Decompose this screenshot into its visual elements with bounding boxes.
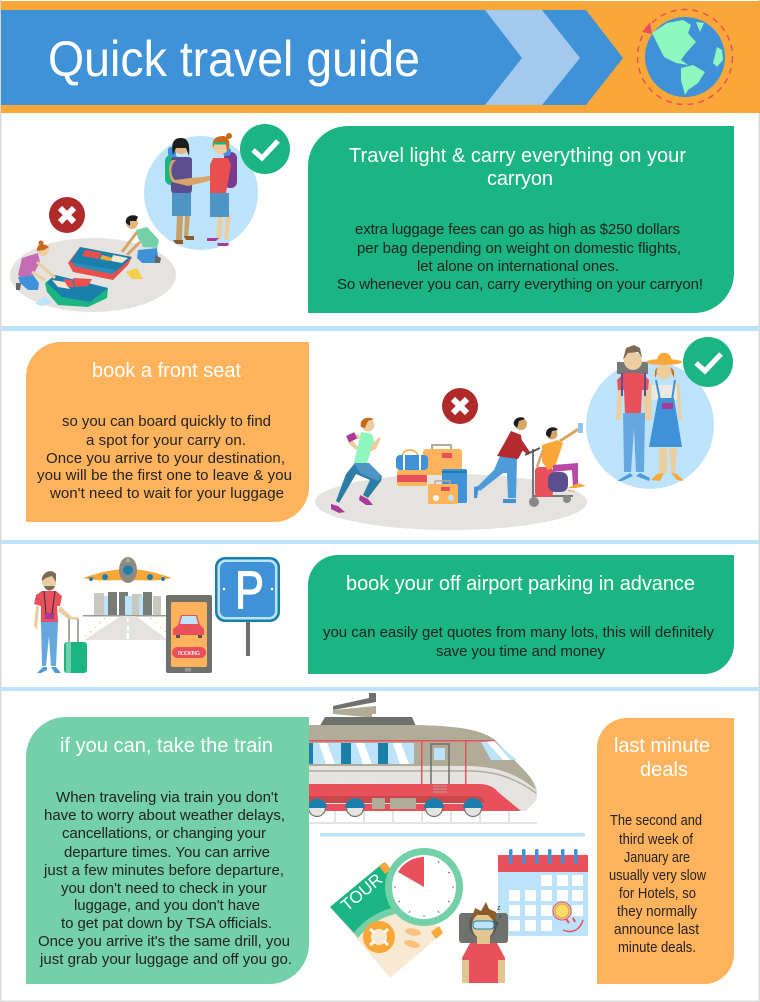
illustration: runner, luggage and trolley — [315, 417, 587, 530]
panel body text: to get pat down by TSA officials. — [61, 915, 272, 932]
kneeling woman — [16, 240, 55, 290]
illustration: sleeping passenger: z — [496, 921, 499, 927]
panel body text — [323, 624, 714, 660]
panel body text: per bag depending on weight on domestic flights, — [357, 240, 681, 257]
illustration: train — [308, 693, 537, 824]
icon: green check — [683, 337, 733, 387]
panel body text: just a few minutes before departure, — [43, 862, 284, 879]
panel body text: you will be the first one to leave & you — [37, 467, 292, 484]
panel: travel light — [308, 126, 734, 313]
panel heading: last minute — [614, 735, 710, 757]
panel body text: luggage, and you don't have — [74, 897, 260, 914]
panel body text: The second and — [610, 812, 702, 829]
icon: parking sign — [215, 557, 280, 656]
icon: parking sign: P — [235, 561, 264, 620]
panel heading: deals — [640, 759, 688, 781]
panel heading — [349, 145, 686, 190]
panel body text — [38, 789, 292, 968]
icon: red cross — [49, 197, 85, 233]
panel body text: January are — [624, 849, 690, 866]
man pushing trolley — [474, 417, 530, 503]
icon: calendar — [498, 849, 588, 936]
panel body text: departure times. You can arrive — [64, 844, 270, 861]
illustration: friends with backpacks — [144, 133, 258, 250]
panel body text: they normally — [617, 903, 697, 920]
illustration: tour ticket: TOUR — [337, 870, 386, 915]
panel body text: so you can board quickly to find — [62, 413, 271, 430]
panel body text: Once you arrive to your destination, — [46, 450, 285, 467]
panel body text — [37, 413, 292, 502]
divider under train — [320, 833, 585, 836]
panel heading: carryon — [487, 168, 553, 190]
panel: parking — [308, 555, 734, 674]
panel body text: announce last — [614, 921, 700, 938]
illustration: phone booking — [166, 595, 212, 673]
illustration: sleeping passenger: z — [497, 905, 501, 912]
panel body text: usually very slow — [609, 867, 706, 884]
panel: take the train — [26, 717, 309, 984]
panel body text: Once you arrive it's the same drill, you — [38, 933, 290, 950]
panel: last minute deals — [597, 718, 734, 984]
panel body text: save you time and money — [436, 643, 606, 660]
illustration: airport road and plane — [83, 555, 172, 640]
runner — [331, 418, 382, 513]
divider band 1 — [1, 326, 759, 331]
panel body text: a spot for your carry on. — [86, 432, 246, 449]
icon: globe — [638, 10, 732, 104]
luggage pile — [396, 445, 467, 504]
illustration: phone booking: BOOKING — [178, 651, 200, 657]
title: Quick travel guide — [48, 31, 420, 87]
panel heading — [614, 735, 710, 781]
illustration: packing suitcases — [10, 215, 176, 312]
panel body text: let alone on international ones. — [417, 258, 619, 275]
panel body text — [337, 221, 703, 293]
panel heading: book a front seat — [92, 360, 241, 382]
illustration: sleeping passenger — [459, 902, 508, 983]
illustration: young couple — [586, 345, 714, 489]
header ribbon — [1, 10, 623, 105]
panel: front seat — [26, 342, 309, 522]
header banner — [1, 1, 760, 113]
icon: clock — [388, 852, 460, 922]
illustration: tour ticket — [330, 862, 443, 978]
icon: red cross — [442, 388, 478, 424]
panel body text: you can easily get quotes from many lots, this will definitely — [323, 624, 714, 641]
panel body text: When traveling via train you don't — [56, 789, 279, 806]
icon: green check — [240, 124, 290, 174]
panel body text: cancellations, or changing your — [62, 825, 266, 842]
panel body text — [609, 812, 706, 956]
panel body text: won't need to wait for your luggage — [49, 485, 284, 502]
illustration: traveller with suitcase — [34, 571, 87, 673]
panel heading: if you can, take the train — [60, 735, 273, 757]
divider band 3 — [1, 687, 759, 691]
panel body text: you don't need to check in your — [61, 880, 267, 897]
panel body text: minute deals. — [618, 939, 696, 956]
divider band 2 — [1, 540, 759, 544]
illustration: sleeping passenger: z — [499, 914, 502, 920]
panel body text: extra luggage fees can go as high as $250 dollars — [355, 221, 680, 238]
panel body text: third week of — [619, 831, 694, 848]
panel body text: for Hotels, so — [619, 885, 696, 902]
ribbon chevron — [485, 10, 580, 105]
panel body text: have to worry about weather delays, — [44, 807, 285, 824]
kneeling man — [122, 215, 161, 263]
panel body text: just grab your luggage and off you go. — [39, 951, 292, 968]
panel heading: Travel light & carry everything on your — [349, 145, 686, 167]
trolley with child — [525, 423, 586, 507]
panel heading: book your off airport parking in advance — [346, 573, 695, 595]
panel body text: So whenever you can, carry everything on your carryon! — [337, 276, 703, 293]
